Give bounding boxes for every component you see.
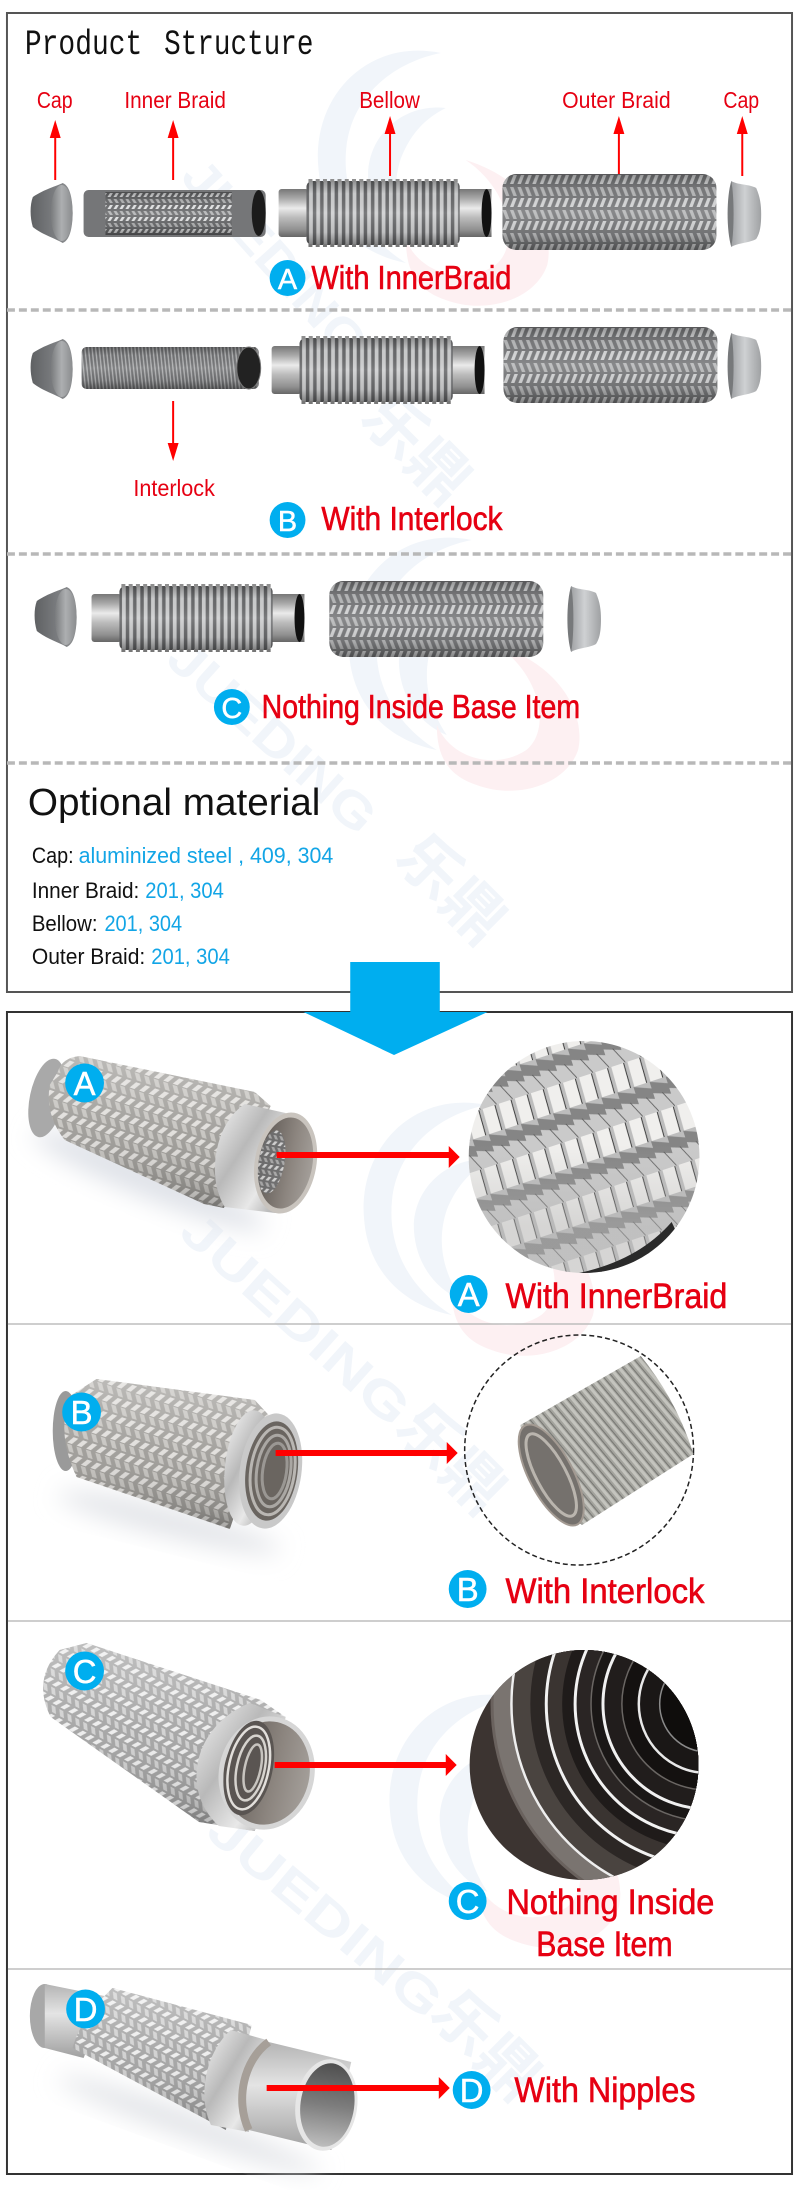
watermark: logo and brand, lower panel: 乐鼎 xyxy=(383,1391,519,1528)
watermark: logo and brand, lower panel xyxy=(170,1103,620,2114)
material list xyxy=(32,843,333,969)
close-up: inner braid xyxy=(469,1041,699,1280)
material list: 201, 304 xyxy=(151,944,230,969)
caption: D With Nipples: With Nipples xyxy=(514,2071,696,2110)
close-up: corrugated interior xyxy=(470,1650,698,1880)
material list: Cap: xyxy=(32,843,74,868)
arrow: D photo to caption xyxy=(267,2077,450,2099)
photo: flexible pipe D with nipples xyxy=(30,1984,363,2184)
caption: C Nothing Inside Base Item: Nothing Inside xyxy=(506,1883,714,1922)
caption: B With Interlock: With Interlock xyxy=(505,1572,705,1611)
watermark: logo and brand, upper panel: 乐鼎 xyxy=(383,821,519,958)
badge D on photo: D xyxy=(74,1991,97,2028)
row A parts: cap, inner braid, bellow, outer braid, cap xyxy=(31,174,761,250)
row B parts: cap, interlock, bellow, outer braid, cap xyxy=(31,327,761,403)
caption: A With InnerBraid: A xyxy=(458,1276,480,1313)
material list: Outer Braid: xyxy=(32,944,145,969)
arrow and label: Interlock xyxy=(133,401,215,501)
material list: Inner Braid: xyxy=(32,878,139,903)
material list: 201, 304 xyxy=(104,911,182,936)
caption: B With Interlock: B xyxy=(457,1571,479,1608)
badge and caption: C Nothing Inside Base Item: C xyxy=(221,693,242,725)
badge and caption: B With Interlock: With Interlock xyxy=(321,500,503,537)
badge A on photo: A xyxy=(74,1065,96,1102)
close-up: interlock in dashed circle xyxy=(465,1335,694,1565)
heading: Optional material: Optional material xyxy=(28,782,320,824)
blue down arrow xyxy=(303,962,488,1055)
part labels with arrows, row A: Bellow xyxy=(359,87,420,113)
badge D on photo xyxy=(66,1990,105,2028)
watermark: logo and brand, lower panel: JUEDING xyxy=(197,1800,454,2030)
watermark: logo and brand, lower panel: 乐鼎 xyxy=(418,1977,554,2114)
watermark: logo and brand, upper panel: JUEDING xyxy=(171,148,379,371)
watermark: logo and brand, lower panel: JUEDING xyxy=(170,1201,422,1437)
title: Product Structure: Product xyxy=(25,26,142,65)
material list: aluminized steel , 409, 304 xyxy=(79,843,333,868)
watermark: logo and brand, upper panel: 乐鼎 xyxy=(348,381,484,518)
caption: C Nothing Inside Base Item: Base Item xyxy=(536,1925,673,1964)
badge and caption: C Nothing Inside Base Item: Nothing Inside Base Item xyxy=(262,688,580,725)
part labels with arrows, row A: Cap xyxy=(723,87,759,113)
title: Product Structure: Structure xyxy=(164,26,313,65)
badge C on photo xyxy=(65,1652,104,1690)
arrow: C photo to close-up xyxy=(275,1754,457,1776)
badge C on photo: C xyxy=(73,1653,96,1690)
watermark: logo and brand, upper panel: JUEDING xyxy=(157,628,388,846)
badge and caption: A With InnerBraid: A xyxy=(278,264,298,296)
material list: Bellow: xyxy=(32,911,98,936)
caption: D With Nipples: D xyxy=(460,2072,483,2109)
caption: A With InnerBraid: With InnerBraid xyxy=(505,1277,727,1316)
badge B on photo xyxy=(62,1392,101,1432)
part labels with arrows, row A: Inner Braid xyxy=(124,87,226,113)
part labels with arrows, row A: Outer Braid xyxy=(562,87,671,113)
arrow: B photo to close-up xyxy=(276,1442,458,1464)
badge A on photo xyxy=(65,1064,104,1102)
watermark: logo and brand, upper panel xyxy=(157,51,580,958)
photo: flexible pipe B xyxy=(53,1379,309,1563)
badge and caption: A With InnerBraid: With InnerBraid xyxy=(311,259,511,296)
caption: C Nothing Inside Base Item: C xyxy=(456,1883,480,1920)
title: Product Structure xyxy=(25,26,313,65)
arrow and label: Interlock: Interlock xyxy=(133,475,215,501)
panel: variants frame xyxy=(7,1012,792,2174)
caption: C Nothing Inside Base Item xyxy=(449,1882,714,1964)
part labels with arrows, row A: Cap xyxy=(37,87,73,113)
arrow: A photo to close-up xyxy=(277,1146,460,1168)
row C parts: cap, bellow, outer braid, cap xyxy=(35,581,601,657)
photo: flexible pipe A xyxy=(22,1055,325,1244)
photo: flexible pipe C xyxy=(43,1643,325,1839)
badge B on photo: B xyxy=(71,1394,93,1431)
badge and caption: B With Interlock: B xyxy=(278,506,297,538)
material list: 201, 304 xyxy=(145,878,224,903)
panel: product structure frame xyxy=(7,13,792,992)
part labels with arrows, row A xyxy=(37,87,759,180)
